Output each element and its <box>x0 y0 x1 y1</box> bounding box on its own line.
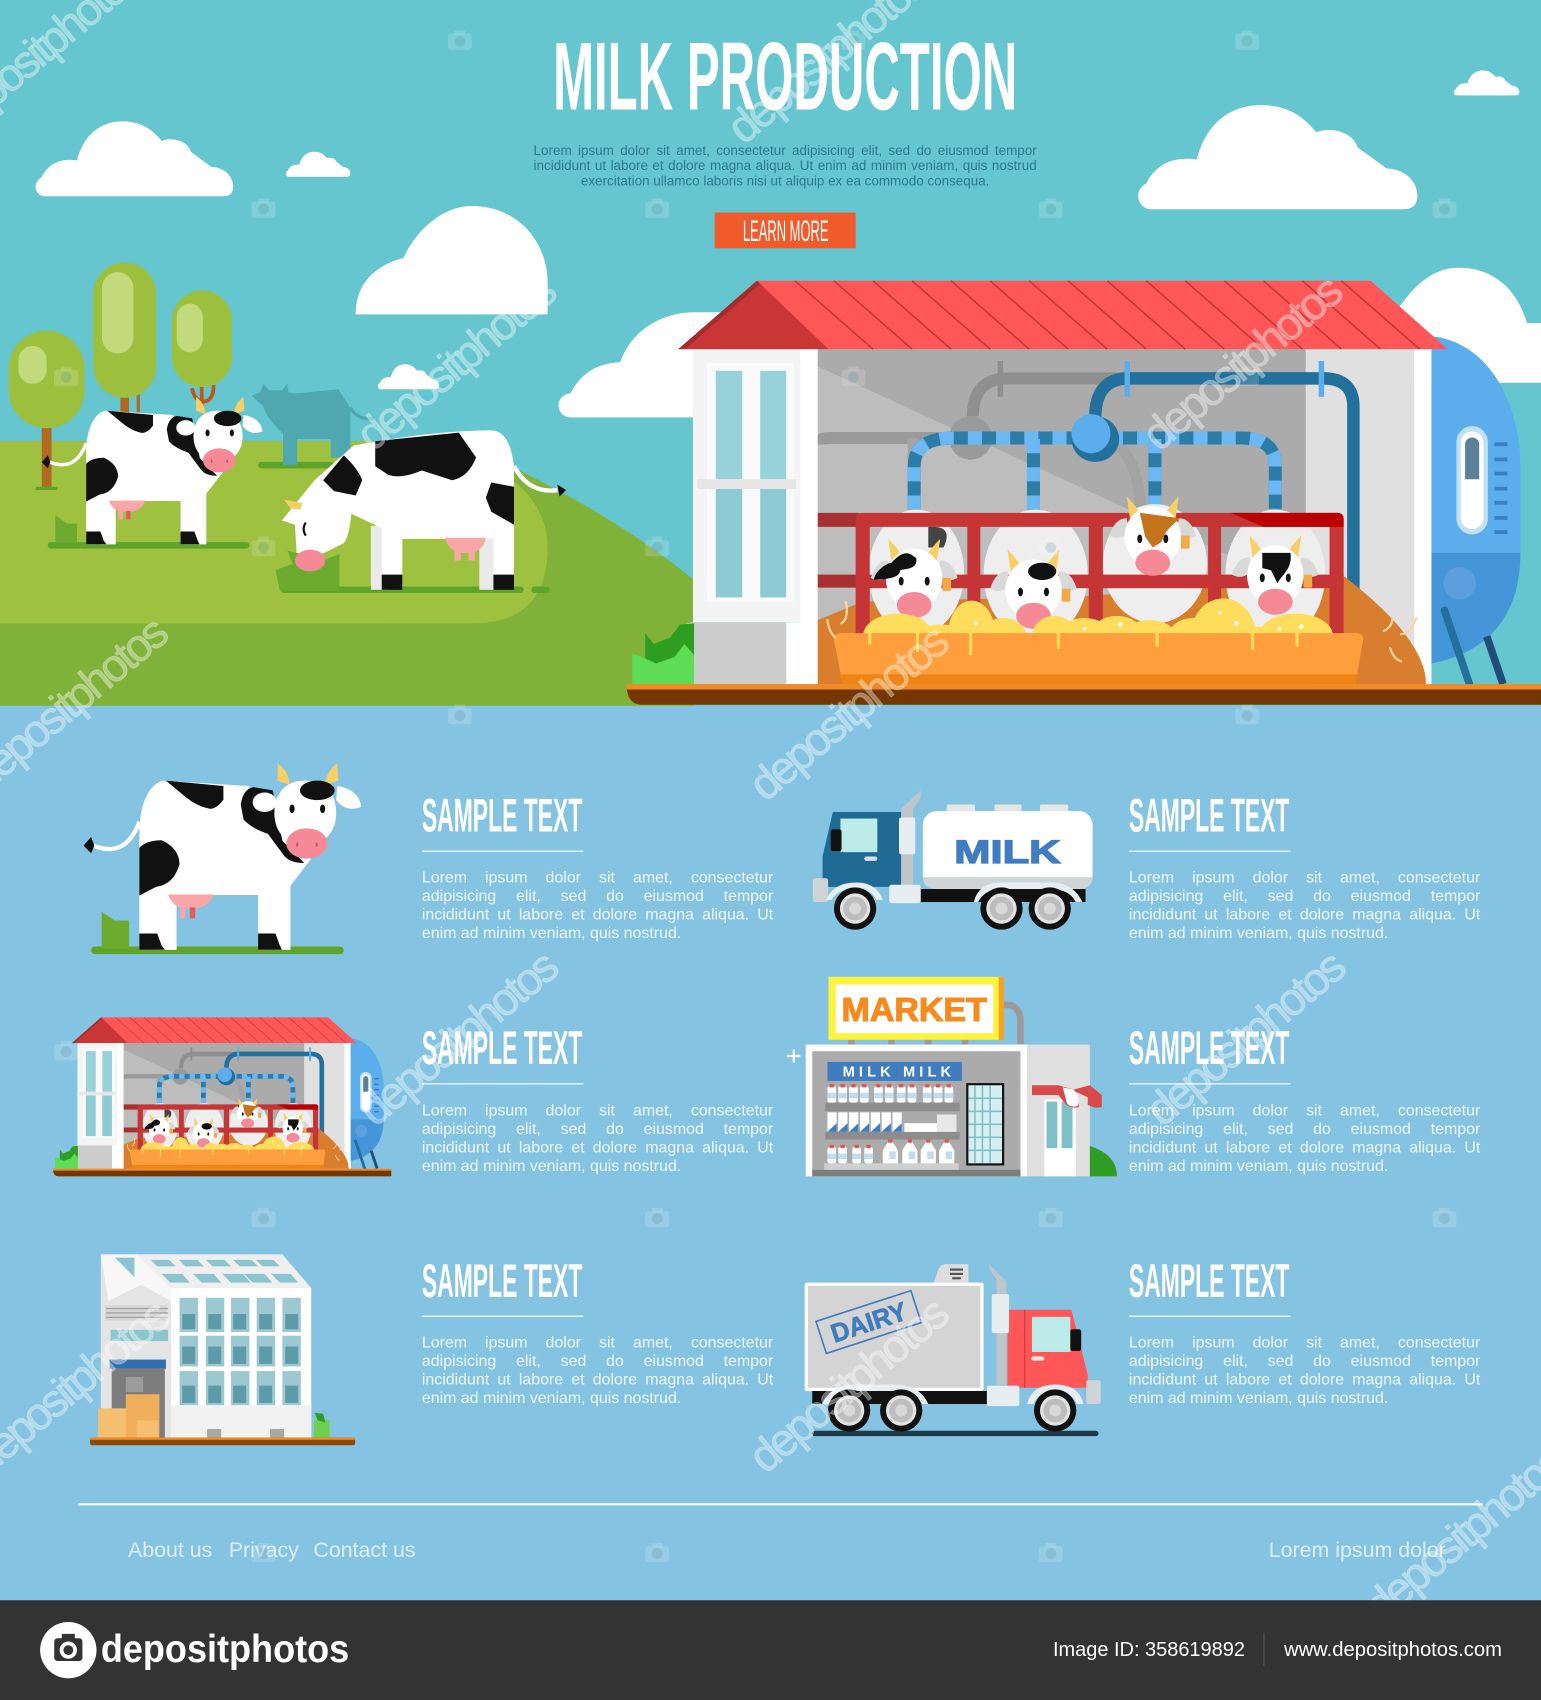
icon: market store <box>787 977 1117 1176</box>
text block: adipisicing elit, sed do eiusmod tempor <box>422 1121 773 1138</box>
panel: hero scene <box>0 0 1541 706</box>
icon: small barn <box>53 1017 391 1176</box>
step: milk truck: SAMPLE TEXT <box>1129 790 1289 843</box>
cow grazing <box>275 430 566 593</box>
intro paragraph: exercitation ullamco laboris nisi ut aliquip ex ea commodo consequa. <box>581 173 989 189</box>
text block: Lorem ipsum dolor sit amet, consectetur <box>1129 1103 1480 1120</box>
icon: dairy factory <box>90 1254 355 1445</box>
pasture hill <box>0 441 694 706</box>
distant cow silhouette <box>252 384 374 468</box>
icon: market store: MILK MILK <box>843 1065 951 1081</box>
text block: Lorem ipsum dolor sit amet, consectetur <box>422 1103 773 1120</box>
text block: incididunt ut labore et dolore magna aliqua. Ut <box>1129 1371 1480 1389</box>
intro paragraph <box>534 143 1037 193</box>
step: market <box>787 977 1480 1179</box>
text block: adipisicing elit, sed do eiusmod tempor <box>1129 888 1480 905</box>
text block: enim ad minim veniam, quis nostrud. <box>422 925 681 942</box>
step: factory <box>90 1254 773 1445</box>
icon: logo camera <box>40 1622 97 1678</box>
text block: Lorem ipsum dolor sit amet, consectetur <box>1129 870 1480 887</box>
step: barn: SAMPLE TEXT <box>422 1022 582 1075</box>
text block <box>422 1103 773 1179</box>
footer links: Privacy <box>229 1538 299 1562</box>
footer links <box>78 1503 1482 1562</box>
watermark overlay: depositphotos <box>739 1287 959 1482</box>
text block: adipisicing elit, sed do eiusmod tempor <box>1129 1353 1480 1370</box>
text block: adipisicing elit, sed do eiusmod tempor <box>1129 1121 1480 1138</box>
text block: enim ad minim veniam, quis nostrud. <box>1129 1390 1388 1407</box>
intro paragraph: Lorem ipsum dolor sit amet, consectetur adipisicing elit, sed do eiusmod tempor <box>534 143 1037 158</box>
icon: cow <box>84 763 361 954</box>
text block: incididunt ut labore et dolore magna aliqua. Ut <box>422 1371 773 1389</box>
button: learn more <box>715 212 856 248</box>
text block: incididunt ut labore et dolore magna aliqua. Ut <box>422 906 773 924</box>
text block: incididunt ut labore et dolore magna aliqua. Ut <box>422 1139 773 1157</box>
text block: enim ad minim veniam, quis nostrud. <box>422 1158 681 1175</box>
site url: www.depositphotos.com <box>1283 1639 1502 1661</box>
step: milk truck <box>813 790 1480 945</box>
barn <box>627 281 1541 705</box>
watermark overlay: depositphotos <box>739 614 959 810</box>
icon: dairy truck <box>805 1264 1101 1436</box>
text block <box>422 1335 773 1411</box>
image id: Image ID: 358619892 <box>1053 1639 1245 1661</box>
text block: adipisicing elit, sed do eiusmod tempor <box>422 1353 773 1370</box>
step: market: SAMPLE TEXT <box>1129 1022 1289 1075</box>
step: cow <box>84 763 773 954</box>
text block <box>1129 870 1480 945</box>
trees <box>9 262 232 490</box>
watermark overlay: depositphotos <box>1133 264 1352 460</box>
clouds <box>36 70 1541 417</box>
footer links: Lorem ipsum dolor <box>1269 1538 1446 1562</box>
intro paragraph: incididunt ut labore et dolore magna aliqua. Ut enim ad minim veniam, quis nostrud <box>534 158 1037 173</box>
step: barn <box>53 1017 773 1179</box>
text block: Lorem ipsum dolor sit amet, consectetur <box>422 1335 773 1352</box>
panel: footer bar <box>0 1600 1541 1700</box>
footer links: About us <box>128 1538 212 1562</box>
footer links: Contact us <box>313 1538 416 1562</box>
icon: market store: MARKET <box>842 992 987 1029</box>
text block <box>422 870 773 945</box>
text block: enim ad minim veniam, quis nostrud. <box>1129 1158 1388 1175</box>
text block: incididunt ut labore et dolore magna aliqua. Ut <box>1129 906 1480 924</box>
icon: dairy truck: DAIRY <box>827 1296 910 1349</box>
icon: milk tanker: MILK <box>954 834 1061 870</box>
panel: lower background <box>0 705 1541 1605</box>
watermark overlay: depositphotos <box>1136 940 1356 1136</box>
step: cow: SAMPLE TEXT <box>422 790 582 843</box>
step: dairy truck <box>805 1255 1480 1436</box>
title: MILK PRODUCTION <box>553 24 1017 130</box>
watermark overlay: depositphotos <box>346 264 566 460</box>
text block <box>1129 1335 1480 1411</box>
text block: enim ad minim veniam, quis nostrud. <box>422 1390 681 1407</box>
sky <box>0 0 1541 706</box>
button: learn more: LEARN MORE <box>743 216 829 248</box>
icon: milk tanker <box>813 790 1093 930</box>
text block <box>1129 1103 1480 1179</box>
text block: enim ad minim veniam, quis nostrud. <box>1129 925 1388 942</box>
watermark overlay: depositphotos <box>349 940 568 1136</box>
text block: Lorem ipsum dolor sit amet, consectetur <box>1129 1335 1480 1352</box>
text block: Lorem ipsum dolor sit amet, consectetur <box>422 870 773 887</box>
step: factory: SAMPLE TEXT <box>422 1255 582 1308</box>
text block: adipisicing elit, sed do eiusmod tempor <box>422 888 773 905</box>
text block: incididunt ut labore et dolore magna aliqua. Ut <box>1129 1139 1480 1157</box>
step: dairy truck: SAMPLE TEXT <box>1129 1255 1289 1308</box>
logo text: depositphotos <box>101 1628 349 1671</box>
cow standing <box>42 397 262 549</box>
